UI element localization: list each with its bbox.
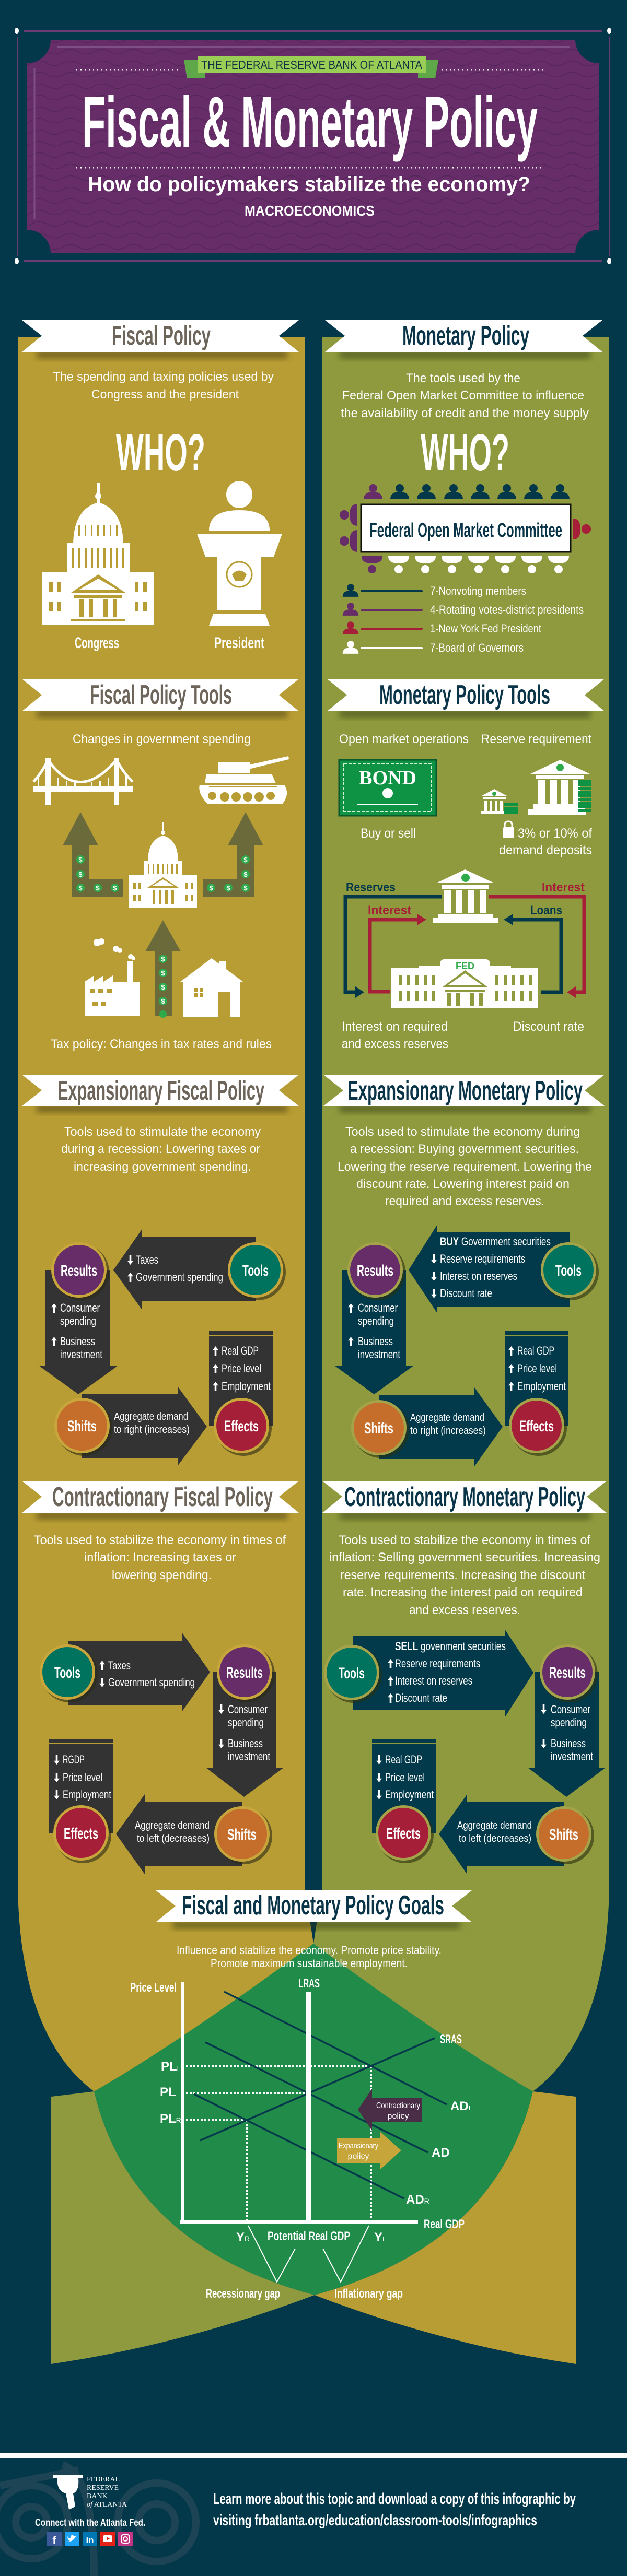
icons: social media: [47, 2532, 133, 2547]
icon: spending arrows with capitol: $: [209, 884, 213, 892]
text: expansionary monetary description: Tools used to stimulate the economy during: [345, 1125, 580, 1139]
icon: tax arrow with factory and house: $: [161, 969, 165, 977]
node: Shifts: [214, 1806, 272, 1864]
text: expansionary fiscal description: increasing government spending.: [74, 1160, 251, 1174]
diagram: expansionary monetary cycle: Employment: [517, 1380, 566, 1393]
diagram: contractionary monetary cycle: Discount rate: [395, 1691, 447, 1704]
diagram: contractionary fiscal cycle: Employment: [63, 1788, 111, 1801]
arrow: shifts to effects: [379, 1387, 503, 1466]
diagram: contractionary monetary cycle: [324, 1629, 606, 1874]
icon: tax arrow with factory and house: $: [161, 983, 165, 991]
ribbon: Fiscal Policy: [22, 320, 299, 358]
icon: tax arrow with factory and house: $: [161, 997, 165, 1005]
node: Results: [217, 1644, 275, 1702]
diagram: expansionary monetary cycle: Interest on reserves: [440, 1269, 517, 1283]
text: fiscal definition: [53, 370, 274, 402]
diagram: contractionary monetary cycle: Employment: [385, 1788, 434, 1801]
diagram: contractionary fiscal cycle: Business: [228, 1737, 263, 1750]
subtitle: How do policymakers stabilize the economy?: [88, 173, 530, 196]
text: expansionary monetary description: required and excess reserves.: [385, 1194, 544, 1208]
icon: spending arrows with capitol: $: [78, 871, 83, 878]
text: expansionary fiscal description: [61, 1125, 261, 1174]
text: monetary definition: [341, 371, 589, 420]
node: Tools: Tools: [242, 1262, 269, 1279]
chart: AD-AS model: YI: [374, 2230, 384, 2244]
node: Results: [51, 1242, 109, 1300]
goblet background shapes: [18, 1889, 609, 2364]
node: Shifts: [351, 1400, 409, 1458]
arrow: contractionary policy: [358, 2089, 422, 2131]
logo: Federal Reserve Bank of Atlanta: BANK: [87, 2492, 108, 2500]
diagram: contractionary monetary cycle: SELL govenment securities: [395, 1640, 506, 1653]
text: tax policy: Tax policy: Changes in tax rates and rules: [51, 1037, 272, 1051]
text: expansionary monetary description: a recession: Buying government securities.: [350, 1142, 579, 1156]
diagram: contractionary fiscal cycle: to left (decreases): [137, 1833, 210, 1844]
node: Effects: [53, 1805, 111, 1863]
box: effects list: [209, 1331, 273, 1426]
text: reserve ratio with lock: [499, 821, 592, 857]
text: contractionary monetary description: and excess reserves.: [409, 1603, 520, 1617]
icon: bond: [339, 760, 436, 816]
arrow: tools to results: [353, 1629, 533, 1718]
text: expansionary monetary description: Lowering the reserve requirement. Lowering the: [338, 1160, 592, 1174]
icons: social media: f: [52, 2534, 56, 2547]
diagram: reserves and loans flow: Loans: [530, 903, 562, 918]
diagram: contractionary monetary cycle: Interest on reserves: [395, 1674, 472, 1687]
node: Shifts: [54, 1398, 112, 1456]
text: monetary definition: the availability of credit and the money supply: [341, 406, 589, 420]
diagram: expansionary monetary cycle: Price level: [517, 1362, 557, 1375]
tag: MACROECONOMICS: [245, 203, 375, 219]
label: Congress: Congress: [75, 634, 119, 652]
arrow: results down to shifts: [528, 1672, 606, 1797]
FOMC table diagram: [340, 484, 591, 573]
diagram: reserves and loans flow: Reserves: [346, 880, 396, 895]
arrow: shifts to effects: [82, 1386, 207, 1466]
chart: AD-AS model: PLR: [160, 2112, 181, 2126]
node: Shifts: Shifts: [549, 1826, 578, 1843]
chart: AD-AS model: Price Level: [130, 1981, 177, 1995]
diagram: contractionary fiscal cycle: Government spending: [108, 1676, 195, 1689]
panel: fiscal column background: [18, 337, 305, 1890]
node: Tools: Tools: [339, 1665, 365, 1682]
text: expansionary monetary description: [338, 1125, 592, 1208]
arrow: tools to results: [409, 1225, 570, 1313]
arrow: tools to results: [113, 1230, 256, 1309]
diagram: contractionary monetary cycle: Business: [551, 1737, 586, 1750]
legend: FOMC members: 1-New York Fed President: [430, 622, 541, 635]
diagram: contractionary monetary cycle: investment: [551, 1750, 593, 1763]
arrow: shifts to effects: [116, 1794, 242, 1874]
diagram: contractionary monetary cycle: Real GDP: [385, 1753, 422, 1766]
text: interest on reserves / discount rate: Discount rate: [513, 1019, 584, 1034]
diagram: expansionary fiscal cycle: Government spending: [136, 1271, 223, 1284]
diagram: contractionary monetary cycle: to left (decreases): [459, 1833, 531, 1844]
node: Shifts: Shifts: [67, 1418, 97, 1435]
legend: FOMC members: 7-Board of Governors: [430, 641, 524, 654]
diagram: expansionary monetary cycle: BUY Government securities: [440, 1235, 551, 1248]
diagram: expansionary monetary cycle: Business: [358, 1335, 393, 1348]
ribbon: Contractionary Fiscal Policy: [22, 1481, 299, 1519]
diagram: reserves and loans flow: [345, 869, 585, 1008]
text: reserve ratio with lock: 3% or 10% of: [518, 826, 592, 841]
diagram: expansionary monetary cycle: Consumer: [358, 1301, 398, 1314]
node: Shifts: [536, 1806, 594, 1864]
diagram: expansionary fiscal cycle: Real GDP: [222, 1344, 259, 1357]
chart: AD-AS model: PLI: [161, 2060, 179, 2074]
heading: WHO? fiscal: WHO?: [116, 424, 205, 482]
ribbon: Fiscal Policy Tools: [22, 679, 299, 717]
arrow: expansionary policy: policy: [348, 2152, 369, 2161]
chart: AD-AS model: SRAS: [440, 2032, 462, 2046]
node: Tools: [541, 1242, 599, 1300]
icon: spending arrows with capitol: $: [243, 856, 248, 864]
logo: Federal Reserve Bank of Atlanta: RESERVE: [87, 2484, 119, 2492]
diagram: expansionary monetary cycle: investment: [358, 1348, 400, 1361]
header banner: [15, 28, 611, 264]
ribbon: Fiscal Policy: Fiscal Policy: [112, 321, 211, 351]
arrow: expansionary policy: [337, 2132, 401, 2170]
icon: President podium: [197, 481, 282, 626]
node: Results: Results: [357, 1262, 393, 1279]
text: contractionary fiscal description: inflation: Increasing taxes or: [84, 1550, 236, 1565]
diagram: expansionary fiscal cycle: spending: [60, 1314, 96, 1327]
box: effects list: [49, 1739, 113, 1833]
node: Effects: [214, 1398, 272, 1456]
ribbon: Expansionary Fiscal Policy: Expansionary Fiscal Policy: [57, 1076, 264, 1106]
chart: AD-AS model: Real GDP: [424, 2217, 465, 2231]
diagram: expansionary fiscal cycle: Consumer: [60, 1301, 100, 1314]
diagram: expansionary fiscal cycle: Business: [60, 1335, 95, 1348]
icon: spending arrows with capitol: $: [78, 856, 83, 864]
node: Results: [540, 1644, 598, 1702]
diagram: expansionary fiscal cycle: Taxes: [136, 1253, 158, 1266]
diagram: reserves and loans flow: Interest: [542, 880, 585, 895]
arrow: tools to results: [68, 1632, 210, 1712]
text: contractionary monetary description: Tools used to stabilize the economy in times of: [339, 1533, 590, 1547]
diagram: contractionary fiscal cycle: investment: [228, 1750, 270, 1763]
text: contractionary fiscal description: [34, 1533, 286, 1582]
logo: Federal Reserve Bank of Atlanta: of ATLANTA: [87, 2501, 127, 2509]
node: Effects: [376, 1805, 434, 1863]
monetary tool labels: Reserve requirement: [481, 732, 591, 746]
ribbon: Expansionary Fiscal Policy: [22, 1075, 299, 1112]
diagram: expansionary fiscal cycle: investment: [60, 1348, 102, 1361]
diagram: expansionary fiscal cycle: to right (increases): [114, 1424, 190, 1436]
icons: social media: in: [86, 2535, 94, 2545]
ribbon: Monetary Policy Tools: [327, 679, 605, 717]
chart: AD-AS model: Potential Real GDP: [268, 2229, 350, 2243]
node: Results: Results: [61, 1262, 97, 1279]
node: Shifts: Shifts: [364, 1420, 393, 1437]
panel: monetary column background: [322, 337, 609, 1890]
box: effects list: [505, 1331, 568, 1426]
text: expansionary monetary description: discount rate. Lowering interest paid on: [356, 1177, 570, 1191]
ribbon: Monetary Policy: [325, 320, 602, 358]
diagram: reserves and loans flow: FED: [456, 961, 474, 971]
monetary tool labels: Open market operations: [339, 732, 469, 746]
legend: FOMC members: 7-Nonvoting members: [430, 584, 526, 597]
text: monetary definition: The tools used by the: [406, 371, 520, 385]
legend: FOMC members: [343, 584, 584, 654]
icon: bridge: [33, 758, 133, 805]
text: fiscal definition: The spending and taxing policies used by: [53, 370, 274, 384]
text: contractionary monetary description: [329, 1533, 600, 1617]
node: Effects: Effects: [64, 1825, 98, 1842]
arrow: results down to shifts: [206, 1672, 284, 1797]
icon: spending arrows with capitol: $: [113, 884, 117, 892]
text: monetary definition: Federal Open Market Committee to influence: [342, 389, 584, 403]
text: buy or sell: Buy or sell: [361, 826, 416, 841]
node: Effects: [509, 1398, 567, 1456]
diagram: contractionary monetary cycle: Reserve requirements: [395, 1657, 480, 1670]
text: interest on reserves / discount rate: [342, 1019, 584, 1051]
icon: spending arrows with capitol: [63, 812, 263, 908]
logo: Federal Reserve Bank of Atlanta: [53, 2475, 127, 2510]
icon: tax arrow with factory and house: $: [161, 955, 165, 963]
diagram: expansionary monetary cycle: Real GDP: [517, 1344, 554, 1357]
diagram: expansionary monetary cycle: spending: [358, 1314, 394, 1327]
text: contractionary fiscal description: lowering spending.: [112, 1568, 212, 1582]
chart: AD-AS model: PL: [160, 2085, 176, 2099]
diagram: expansionary monetary cycle: to right (increases): [410, 1425, 486, 1437]
text: reserve ratio with lock: demand deposits: [499, 843, 592, 857]
icon: Congress capitol: [42, 483, 154, 625]
icon: tax arrow with factory and house: [85, 920, 243, 1018]
diagram: expansionary fiscal cycle: Price level: [222, 1362, 261, 1375]
ribbon: Contractionary Monetary Policy: [322, 1481, 607, 1519]
text: learn more: [213, 2490, 576, 2529]
node: Effects: Effects: [224, 1418, 259, 1435]
diagram: contractionary fiscal cycle: Taxes: [108, 1659, 131, 1672]
text: interest on reserves / discount rate: and excess reserves: [342, 1037, 448, 1051]
text: contractionary monetary description: rate. Increasing the interest paid on required: [343, 1585, 583, 1599]
diagram: expansionary monetary cycle: Reserve requirements: [440, 1252, 525, 1265]
diagram: contractionary fiscal cycle: spending: [228, 1716, 264, 1729]
diagram: contractionary fiscal cycle: Consumer: [228, 1703, 268, 1716]
node: Results: [347, 1242, 405, 1300]
chart: AD-AS model: LRAS: [298, 1977, 320, 1991]
chart: AD-AS model: ADR: [406, 2193, 429, 2207]
arrow: contractionary policy: Contractionary: [376, 2101, 420, 2110]
node: Tools: Tools: [54, 1664, 80, 1681]
chart: AD-AS model: Recessionary gap: [206, 2287, 280, 2301]
ribbon: Contractionary Fiscal Policy: Contractionary Fiscal Policy: [52, 1482, 273, 1512]
diagram: contractionary fiscal cycle: [40, 1632, 284, 1874]
text: changes in government spending: Changes in government spending: [73, 732, 251, 746]
text: expansionary fiscal description: Tools used to stimulate the economy: [64, 1125, 261, 1139]
chart: AD-AS model: Inflationary gap: [334, 2287, 403, 2301]
diagram: contractionary monetary cycle: Aggregate demand: [457, 1820, 532, 1831]
text: contractionary monetary description: inflation: Selling government securities. Increasing: [329, 1550, 600, 1565]
node: Shifts: Shifts: [227, 1826, 257, 1843]
ribbon: Expansionary Monetary Policy: [323, 1075, 605, 1112]
icon: banks with reserves: [481, 760, 591, 815]
diagram: contractionary fiscal cycle: Price level: [63, 1771, 102, 1784]
ribbon: Fiscal and Monetary Policy Goals: [156, 1890, 472, 1928]
icon: spending arrows with capitol: $: [96, 884, 100, 892]
icon: spending arrows with capitol: $: [243, 884, 248, 892]
heading: WHO? monetary: WHO?: [421, 424, 509, 482]
text: goals description: [177, 1944, 442, 1970]
footer: [0, 2453, 627, 2576]
node: Effects: Effects: [519, 1418, 554, 1435]
arrow: expansionary policy: Expansionary: [339, 2142, 378, 2150]
ribbon: Monetary Policy: Monetary Policy: [402, 321, 529, 351]
diagram: contractionary fiscal cycle: Aggregate demand: [135, 1820, 210, 1831]
diagram: expansionary fiscal cycle: [39, 1230, 286, 1466]
diagram: expansionary monetary cycle: [334, 1225, 599, 1466]
legend: FOMC members: 4-Rotating votes-district presidents: [430, 603, 584, 616]
diagram: contractionary fiscal cycle: RGDP: [63, 1753, 85, 1766]
publisher ribbon: THE FEDERAL RESERVE BANK OF ATLANTA: [201, 58, 423, 72]
monetary tool labels: [339, 732, 591, 746]
icon: bond: BOND: [359, 767, 416, 789]
diagram: reserves and loans flow: Interest: [368, 903, 411, 918]
icon: spending arrows with capitol: $: [226, 884, 230, 892]
diagram: expansionary fiscal cycle: Aggregate demand: [114, 1411, 188, 1422]
arrow: contractionary policy: policy: [388, 2112, 409, 2121]
diagram: contractionary monetary cycle: Consumer: [551, 1703, 590, 1716]
diagram: expansionary monetary cycle: Discount rate: [440, 1287, 492, 1300]
node: Results: Results: [226, 1664, 263, 1681]
chart: AD-AS model: AD: [432, 2146, 450, 2160]
icon: spending arrows with capitol: $: [78, 884, 83, 892]
node: Tools: Tools: [555, 1262, 582, 1279]
node: Tools: [40, 1644, 98, 1702]
ribbon: Fiscal and Monetary Policy Goals: Fiscal and Monetary Policy Goals: [182, 1890, 444, 1921]
label: President: President: [214, 634, 264, 652]
diagram: contractionary monetary cycle: Price level: [385, 1771, 425, 1784]
text: contractionary fiscal description: Tools used to stabilize the economy in times of: [34, 1533, 286, 1547]
box: effects list: [372, 1739, 436, 1833]
text: connect: Connect with the Atlanta Fed.: [35, 2518, 145, 2528]
arrow: results to shifts: [39, 1270, 118, 1394]
node: Effects: Effects: [386, 1825, 421, 1842]
arrow: shifts to effects: [439, 1794, 564, 1874]
ribbon: Fiscal Policy Tools: Fiscal Policy Tools: [90, 680, 232, 710]
node: Results: Results: [549, 1664, 586, 1681]
diagram: contractionary monetary cycle: spending: [551, 1716, 587, 1729]
chart: AD-AS model: [130, 1977, 470, 2301]
chart: AD-AS model: ADI: [450, 2099, 470, 2113]
chart: AD-AS model: YR: [236, 2230, 250, 2244]
icon: tank: [199, 756, 289, 804]
text: goals description: Influence and stabilize the economy. Promote price stability.: [177, 1944, 442, 1957]
text: contractionary monetary description: reserve requirements. Increasing the discount: [340, 1568, 585, 1582]
icon: spending arrows with capitol: $: [243, 871, 248, 878]
publisher ribbon: [184, 56, 438, 78]
arrow: results to shifts: [334, 1270, 414, 1394]
diagram: expansionary monetary cycle: Aggregate demand: [410, 1412, 484, 1424]
diagram: expansionary fiscal cycle: Employment: [222, 1380, 271, 1393]
text: goals description: Promote maximum sustainable employment.: [211, 1957, 408, 1970]
text: interest on reserves / discount rate: Interest on required: [342, 1019, 448, 1034]
logo: Federal Reserve Bank of Atlanta: FEDERAL: [87, 2476, 120, 2484]
text: expansionary fiscal description: during a recession: Lowering taxes or: [61, 1142, 260, 1156]
text: fiscal definition: Congress and the president: [91, 387, 239, 402]
node: Tools: [228, 1242, 286, 1300]
node: Tools: [324, 1645, 382, 1703]
